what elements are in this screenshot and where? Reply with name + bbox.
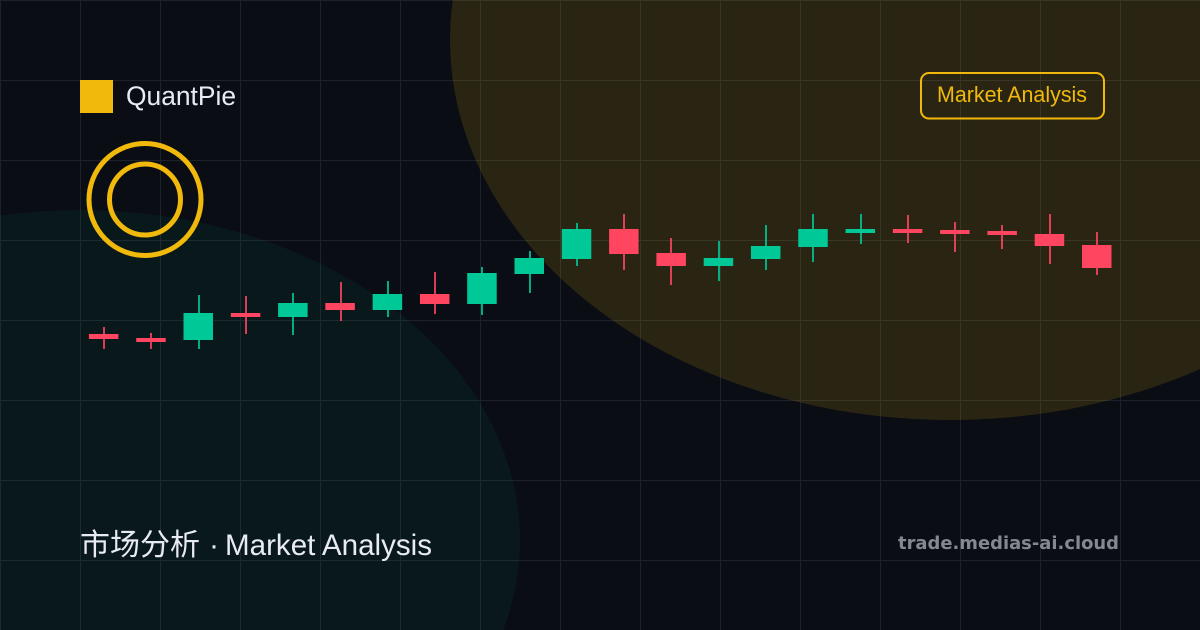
candlestick chart <box>89 214 1111 349</box>
brand name: QuantPie <box>126 81 236 111</box>
candle 18 <box>893 215 922 243</box>
candle 1 <box>89 327 118 349</box>
title: market analysis: Market Analysis <box>225 529 432 562</box>
title: market analysis: · <box>209 529 219 562</box>
candle 16 <box>798 214 828 262</box>
icon: concentric gold rings <box>89 144 201 256</box>
candle 4 <box>231 296 260 334</box>
candle 15 <box>751 225 780 270</box>
candle 13 <box>656 238 686 285</box>
background ellipse: gold <box>450 0 1200 420</box>
logo mark: gold square <box>80 80 113 113</box>
candle 3 <box>184 295 213 349</box>
candle 6 <box>325 282 355 321</box>
candle 20 <box>987 225 1017 249</box>
candle 21 <box>1035 214 1064 264</box>
title: market analysis: 市场分析 <box>80 529 200 562</box>
candle 17 <box>846 214 875 244</box>
badge: Market Analysis: Market Analysis <box>937 82 1087 107</box>
candle 5 <box>278 293 308 335</box>
candle 19 <box>940 222 970 252</box>
candle 11 <box>562 223 591 266</box>
background ellipse: teal <box>0 210 520 630</box>
candle 7 <box>373 281 402 317</box>
candle 8 <box>420 272 449 314</box>
candle 22 <box>1082 232 1112 275</box>
badge: Market Analysis <box>921 73 1104 118</box>
candle 10 <box>514 251 544 293</box>
candle 14 <box>704 241 733 281</box>
title: market analysis <box>80 529 432 562</box>
candle 9 <box>467 267 497 315</box>
site url: trade.medias-ai.cloud <box>898 533 1119 554</box>
candle 12 <box>609 214 639 270</box>
candle 2 <box>136 333 166 349</box>
